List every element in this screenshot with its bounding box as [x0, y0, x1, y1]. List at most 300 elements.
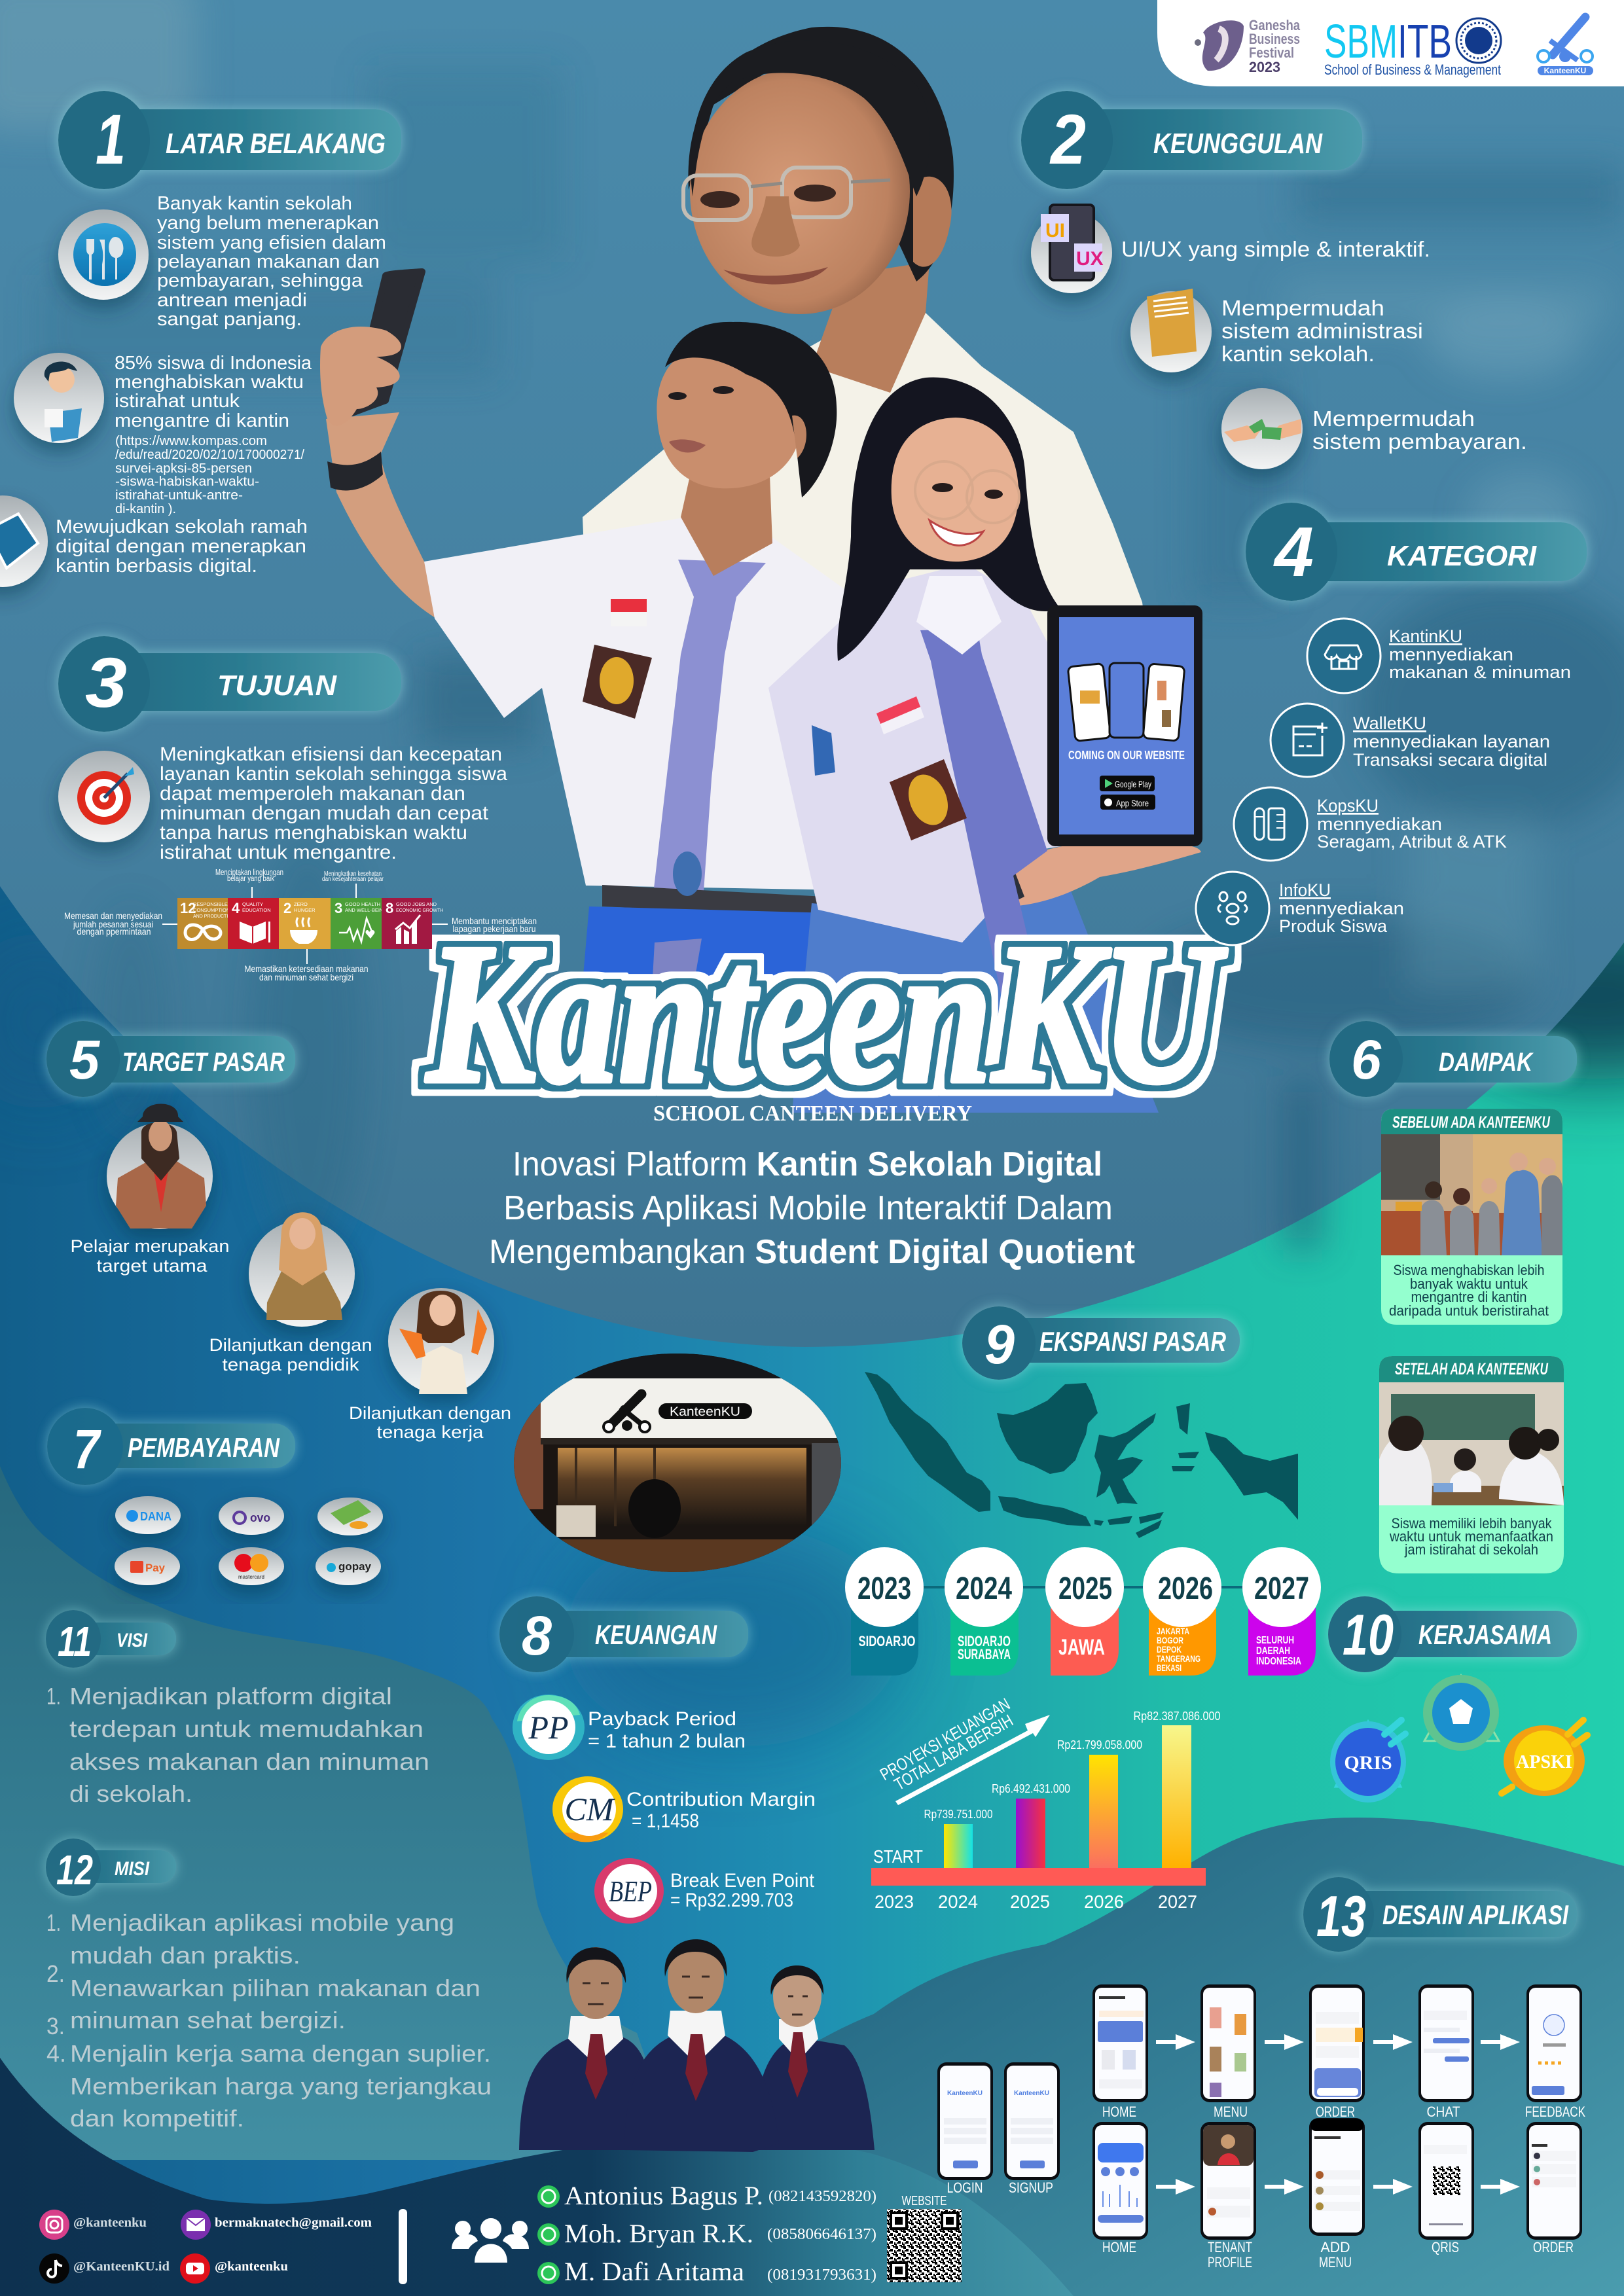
panel: keunggulan items: UI/UX yang simple & interaktif.: [1121, 237, 1430, 261]
KopsKU item: Seragam, Atribut & ATK: [1317, 832, 1507, 852]
panel: tujuan text with target icon: minuman dengan mudah dan cepat: [160, 802, 489, 824]
panel: latar belakang text and icons: Mewujudkan sekolah ramah: [56, 516, 308, 537]
InfoKU item: [1196, 872, 1404, 945]
Mastercard: [219, 1547, 284, 1585]
social media contacts: @kanteenku: [215, 2259, 288, 2274]
panel: financial metrics: Contribution Margin: [626, 1789, 816, 1810]
subtitle: Berbasis Aplikasi Mobile Interaktif Dalam: [503, 1189, 1113, 1227]
app design screens: ADD: [1321, 2239, 1350, 2255]
2027 nationwide: 2027: [1254, 1571, 1309, 1606]
heading 4 Kategori: KATEGORI: [1387, 540, 1537, 572]
card: sebelum ada KanteenKU: mengantre di kantin: [1411, 1289, 1526, 1305]
panel: tujuan text with target icon: dapat memperoleh makanan dan: [160, 783, 465, 804]
projection bar chart: [871, 1694, 1220, 1912]
app design screens: SIGNUP: [1009, 2179, 1053, 2196]
icon: youtube: [180, 2253, 210, 2284]
contact: Antonius: (082143592820): [768, 2188, 876, 2205]
icon: student reading: [14, 353, 104, 443]
QRIS logo: QRIS: [1344, 1752, 1392, 1774]
KantinKU item: [1307, 619, 1571, 693]
arrows row 2: [1156, 2179, 1520, 2195]
KanteenKU small logo: KanteenKU: [1544, 66, 1586, 75]
2027 nationwide: SELURUH: [1256, 1635, 1294, 1646]
map of Indonesia: [865, 1372, 1298, 1538]
app design screens: MENU: [1214, 2104, 1248, 2120]
APSKI logo: [1502, 1720, 1587, 1796]
subtitle: [489, 1145, 1135, 1271]
card: sebelum ada KanteenKU: [1381, 1109, 1562, 1325]
heading 6 Dampak: [1329, 1021, 1577, 1097]
icon: tiktok: [39, 2253, 69, 2284]
contact: Dafi: M. Dafi Aritama: [564, 2257, 744, 2286]
team member left: [519, 1947, 658, 2150]
panel: latar belakang text and icons: sangat panjang.: [157, 309, 302, 330]
heading 9 Ekspansi Pasar: [962, 1306, 1240, 1380]
projection bar chart: START: [873, 1846, 923, 1867]
2026 cities: BEKASI: [1157, 1662, 1182, 1673]
heading 2 Keunggulan: 2: [1049, 99, 1086, 179]
heading 5 Target Pasar: 5: [69, 1029, 100, 1090]
panel: latar belakang text and icons: mengantre di kantin: [115, 410, 289, 431]
misi list: 2.: [46, 1960, 65, 1987]
OVO: ovo: [250, 1511, 270, 1524]
panel: target pasar people: Pelajar merupakan: [71, 1236, 229, 1256]
GoPay: gopay: [338, 1560, 372, 1573]
KopsKU item: [1234, 787, 1507, 861]
SDG 3: GOOD HEALTH: [345, 901, 380, 907]
card: sebelum ada KanteenKU: Siswa menghabiskan lebih: [1393, 1262, 1545, 1278]
photo: KanteenKU canteen booth: [514, 1353, 848, 1573]
2024 Sidoarjo Surabaya: 2024: [956, 1571, 1012, 1606]
InfoKU item: mennyediakan: [1279, 899, 1404, 918]
misi list: Menjalin kerja sama dengan suplier.: [70, 2040, 491, 2067]
SDG 4: QUALITY: [242, 901, 263, 907]
visi list: Menjadikan platform digital: [69, 1683, 392, 1710]
heading 1 Latar Belakang: [58, 91, 401, 189]
SDG 12: AND PRODUCTION: [193, 914, 235, 919]
icon: UI UX phone: UI: [1045, 220, 1065, 242]
heading 1 Latar Belakang: 1: [96, 99, 126, 179]
card: setelah ada KanteenKU: Siswa memiliki lebih banyak: [1392, 1515, 1552, 1532]
misi list: Menjadikan aplikasi mobile yang: [70, 1909, 454, 1936]
Mastercard: mastercard: [238, 1574, 264, 1580]
screen: signup: [1004, 2062, 1060, 2180]
panel: payment methods: [115, 1496, 383, 1585]
team member centre: [624, 1939, 779, 2152]
SDG callout top: dan kesejahteraan pelajar: [322, 876, 384, 883]
SBM ITB logo: SBM: [1324, 16, 1398, 68]
QRIS logo: [1330, 1720, 1406, 1803]
panel: financial metrics: Break Even Point: [670, 1870, 815, 1892]
Tut Wuri Handayani logo: [1423, 1675, 1499, 1751]
misi list: 4.: [46, 2040, 66, 2067]
2026 cities: DEPOK: [1157, 1644, 1182, 1655]
card: sebelum ada KanteenKU: banyak waktu untuk: [1410, 1276, 1528, 1292]
market expansion timeline: [845, 1547, 1321, 1676]
projection bar chart: 2025: [1010, 1892, 1050, 1912]
website QR code: [887, 2194, 962, 2282]
visi list: 1.: [46, 1683, 61, 1710]
projection bar chart: 2023: [875, 1892, 914, 1912]
visi list: akses makanan dan minuman: [69, 1748, 429, 1775]
heading 12 Misi: [46, 1839, 176, 1896]
SDG 8: [382, 898, 443, 949]
visi list: terdepan untuk memudahkan: [69, 1715, 424, 1742]
app design screens: [937, 1984, 1585, 2270]
heading 12 Misi: MISI: [115, 1858, 150, 1880]
ShopeePay: Pay: [145, 1562, 166, 1574]
SDG 3: 3: [334, 900, 342, 916]
tablet mini phones: [1068, 663, 1185, 742]
heading 7 Pembayaran: [47, 1408, 295, 1485]
2025 Jawa: JAWA: [1058, 1635, 1105, 1660]
SDG 12: 12: [180, 900, 196, 916]
App Store badge: [1100, 795, 1155, 810]
KantinKU item: makanan & minuman: [1389, 662, 1571, 682]
panel: financial metrics: [513, 1695, 816, 1924]
projection bar chart: 2024: [938, 1892, 978, 1912]
panel: latar belakang text and icons: -siswa-habiskan-waktu-: [115, 475, 259, 489]
heading 10 Kerjasama: [1328, 1596, 1577, 1672]
heading 10 Kerjasama: KERJASAMA: [1418, 1619, 1552, 1650]
icon: people group: [452, 2218, 529, 2263]
badge: CM: [552, 1776, 623, 1842]
boy arm and phone: [320, 272, 455, 619]
heading 13 Desain Aplikasi: [1303, 1877, 1577, 1952]
badge: CM: CM: [564, 1791, 615, 1827]
screen: add menu: [1309, 2118, 1365, 2236]
SDG callout bottom: Memastikan ketersediaan makanan: [245, 963, 368, 974]
heading 3 Tujuan: [58, 636, 401, 732]
KantinKU item: mennyediakan: [1389, 645, 1513, 664]
team contact list: [537, 2181, 876, 2286]
arrows row 1: [1156, 2034, 1520, 2050]
panel: keunggulan items: Mempermudah: [1221, 296, 1384, 320]
tablet showing the app: [1047, 605, 1202, 846]
partner logos: [1330, 1675, 1587, 1803]
arrow with projection caption: PROYEKSI KEUANGAN: [876, 1694, 1013, 1784]
social media contacts: @kanteenku: [73, 2215, 147, 2230]
OVO: [219, 1497, 284, 1535]
heading 2 Keunggulan: [1021, 91, 1362, 189]
team member right: [753, 1965, 875, 2150]
SDG callout sides: lapagan pekerjaan baru: [453, 924, 535, 934]
screen: home wallet: [1092, 2122, 1148, 2240]
misi list: Memberikan harga yang terjangkau: [70, 2073, 492, 2100]
worker: [388, 1288, 494, 1394]
SDG 4: 4: [232, 900, 240, 916]
Ganesha Business Festival logo: [1195, 17, 1301, 75]
panel: keunggulan items: kantin sekolah.: [1221, 342, 1375, 366]
projection bar chart: Rp21.799.058.000: [1057, 1738, 1142, 1751]
panel: latar belakang text and icons: pelayanan makanan dan: [157, 251, 380, 272]
GoPay: [316, 1547, 381, 1585]
card: setelah ada KanteenKU: waktu untuk memanfaatkan: [1389, 1528, 1553, 1545]
panel: target pasar people: tenaga kerja: [377, 1422, 484, 1442]
screen: QRIS code: [1418, 2122, 1474, 2240]
cash: [317, 1498, 383, 1535]
icon: instagram: [39, 2210, 69, 2240]
SDG callout top: Meningkatkan kesehatan: [324, 870, 382, 878]
2026 cities: [1143, 1547, 1221, 1676]
SBM ITB logo: ITB: [1398, 16, 1452, 68]
screen: home: [1092, 1984, 1148, 2102]
2026 cities: JAKARTA: [1157, 1626, 1189, 1636]
panel: target pasar people: tenaga pendidik: [223, 1355, 359, 1374]
SDG callout bottom: dan minuman sehat bergizi: [259, 972, 353, 982]
InfoKU item: InfoKU: [1279, 880, 1331, 900]
panel: latar belakang text and icons: di-kantin ).: [115, 502, 176, 516]
WalletKU item: [1271, 704, 1550, 777]
heading 9 Ekspansi Pasar: 9: [984, 1314, 1015, 1375]
2024 Sidoarjo Surabaya: SURABAYA: [958, 1646, 1011, 1662]
misi list: 3.: [46, 2013, 65, 2039]
heading 6 Dampak: DAMPAK: [1439, 1048, 1534, 1077]
sponsor logos panel: [1157, 0, 1624, 86]
panel: tujuan text with target icon: tanpa harus menghabiskan waktu: [160, 822, 467, 844]
Ganesha Business Festival logo: Festival: [1249, 45, 1294, 61]
screen: chat: [1418, 1984, 1474, 2102]
WalletKU item: WalletKU: [1353, 713, 1426, 733]
icon: UI UX phone: [1031, 205, 1112, 293]
card: setelah ada KanteenKU: [1379, 1356, 1564, 1573]
badge: PP: PP: [528, 1709, 569, 1746]
panel: latar belakang text and icons: sistem yang efisien dalam: [157, 232, 386, 253]
blurred photo texture in the top background: [0, 0, 1624, 1257]
Ganesha Business Festival logo: Business: [1249, 31, 1300, 47]
misi list: minuman sehat bergizi.: [70, 2007, 346, 2034]
heading 13 Desain Aplikasi: 13: [1316, 1884, 1366, 1948]
screen: menu: [1200, 1984, 1256, 2102]
icon: UI UX phone: UX: [1076, 248, 1104, 270]
contact: Bryan: [537, 2219, 876, 2248]
SDG callout bottom: [245, 963, 368, 982]
icon: cutlery: [58, 209, 149, 300]
heading 8 Keuangan: [499, 1596, 748, 1672]
icon: email: [181, 2210, 211, 2240]
SBM ITB logo: [1324, 16, 1501, 78]
KantinKU item: KantinKU: [1389, 626, 1462, 646]
projection bar chart: Rp6.492.431.000: [992, 1782, 1070, 1795]
left blob (visi misi): [0, 1466, 681, 2160]
photo: KanteenKU canteen booth: KanteenKU: [670, 1405, 740, 1419]
panel: latar belakang text and icons: 85% siswa di Indonesia: [115, 353, 312, 374]
SDG 2: ZERO: [294, 901, 308, 907]
contact: Dafi: (081931793631): [767, 2267, 876, 2284]
social media contacts: bermaknatech@gmail.com: [215, 2215, 372, 2230]
contact: Dafi: [537, 2257, 876, 2286]
screen: login: KanteenKU: [947, 2090, 983, 2097]
SDG 8: ECONOMIC GROWTH: [396, 908, 443, 913]
panel: keunggulan items: sistem administrasi: [1221, 319, 1423, 343]
heading 10 Kerjasama: 10: [1343, 1602, 1394, 1667]
SDG callout top: Menciptakan lingkungan: [215, 868, 283, 877]
panel: kategori list: [1196, 619, 1571, 945]
projection bar chart: Rp739.751.000: [924, 1808, 992, 1821]
panel: tujuan text with target icon: layanan kantin sekolah sehingga siswa: [160, 763, 507, 785]
tagline: SCHOOL CANTEEN DELIVERY: [653, 1102, 972, 1126]
heading 3 Tujuan: TUJUAN: [217, 670, 337, 702]
panel: financial metrics: Payback Period: [588, 1708, 736, 1730]
2025 Jawa: [1045, 1547, 1124, 1676]
bottom right blob (section 13): [641, 1818, 1624, 2296]
contact: Antonius: Antonius Bagus P.: [564, 2181, 763, 2210]
App Store badge: App Store: [1116, 798, 1149, 808]
heading 4 Kategori: 4: [1273, 512, 1314, 591]
2027 nationwide: INDONESIA: [1256, 1656, 1301, 1667]
SDG 2: 2: [283, 900, 291, 916]
heading 5 Target Pasar: TARGET PASAR: [122, 1048, 285, 1077]
panel: tujuan text with target icon: istirahat untuk mengantre.: [160, 842, 397, 863]
icon: money exchange: [1221, 388, 1303, 469]
heading 12 Misi: 12: [56, 1846, 93, 1893]
heading 4 Kategori: [1246, 503, 1587, 601]
panel: latar belakang text and icons: menghabiskan waktu: [115, 372, 304, 393]
man front hair: [691, 41, 930, 196]
2023 Sidoarjo: 2023: [857, 1571, 911, 1606]
2024 Sidoarjo Surabaya: [945, 1547, 1023, 1676]
badge: PP: [513, 1695, 585, 1760]
screen: order list: [1526, 2122, 1582, 2240]
heading 2 Keunggulan: KEUNGGULAN: [1153, 128, 1323, 160]
boy student: [320, 272, 844, 1060]
SDG 12: [177, 898, 235, 949]
panel: latar belakang text and icons: (https://www.kompas.com: [115, 434, 267, 448]
dark shading behind circle edge: [0, 910, 1624, 1748]
SDG callout sides: [64, 910, 537, 937]
badge: BEP: BEP: [609, 1874, 652, 1908]
SDG 12: CONSUMPTION: [193, 907, 230, 913]
misi list: 1.: [46, 1909, 61, 1936]
2027 nationwide: [1242, 1547, 1321, 1676]
subtitle: Inovasi Platform Kantin Sekolah Digital: [513, 1145, 1102, 1183]
social media contacts: [39, 2210, 372, 2284]
KanteenKU main logo: KanteenKU: [424, 902, 1227, 1125]
SDG 3: [331, 898, 387, 949]
ShopeePay: [115, 1547, 180, 1585]
InfoKU item: Produk Siswa: [1279, 916, 1388, 936]
visi list: di sekolah.: [69, 1780, 192, 1807]
social media contacts: @KanteenKU.id: [73, 2259, 170, 2274]
KopsKU item: KopsKU: [1317, 796, 1379, 816]
app design screens: FEEDBACK: [1525, 2104, 1585, 2120]
icon: target: [58, 751, 150, 842]
2023 Sidoarjo: SIDOARJO: [859, 1633, 915, 1649]
panel: financial metrics: = Rp32.299.703: [670, 1890, 793, 1911]
contact: Bryan: (085806646137): [767, 2226, 876, 2243]
screen: order: [1309, 1984, 1365, 2102]
panel: latar belakang text and icons: digital dengan menerapkan: [56, 536, 306, 557]
visi list: [46, 1683, 429, 1807]
panel: latar belakang text and icons: /edu/read/2020/02/10/170000271/: [115, 448, 304, 462]
SDG 4: EDUCATION: [242, 907, 271, 913]
heading 9 Ekspansi Pasar: EKSPANSI PASAR: [1039, 1326, 1227, 1357]
projection bar chart: 2027: [1158, 1892, 1197, 1912]
Ganesha Business Festival logo: Ganesha: [1249, 17, 1301, 33]
contact: Bryan: Moh. Bryan R.K.: [564, 2219, 753, 2248]
screen: tenant profile: [1200, 2122, 1256, 2240]
website QR code: WEBSITE: [902, 2194, 947, 2208]
photo: queue at school canteen: [1381, 1134, 1562, 1255]
2025 Jawa: 2025: [1058, 1571, 1112, 1606]
app design screens: PROFILE: [1208, 2254, 1252, 2270]
teacher: [249, 1212, 355, 1327]
subtitle: Mengembangkan Student Digital Quotient: [489, 1233, 1135, 1271]
SDG 2: [279, 898, 331, 949]
APSKI logo: APSKI: [1516, 1752, 1572, 1772]
SDG goals block: [64, 868, 537, 982]
KanteenKU small logo: [1538, 17, 1593, 75]
SDG callout sides: Memesan dan menyediakan: [64, 910, 162, 921]
panel: latar belakang text and icons: istirahat-untuk-antre-: [115, 488, 243, 503]
app design screens: LOGIN: [947, 2179, 983, 2196]
bottom contact band: [0, 2058, 1074, 2296]
heading 7 Pembayaran: PEMBAYARAN: [128, 1432, 280, 1463]
panel: tujuan text with target icon: [58, 744, 507, 863]
Ganesha Business Festival logo: 2023: [1249, 59, 1280, 75]
card: sebelum ada KanteenKU: SEBELUM ADA KANTEENKU: [1392, 1113, 1551, 1132]
2027 nationwide: DAERAH: [1256, 1645, 1290, 1657]
SDG callout sides: jumlah pesanan sesuai: [73, 919, 153, 929]
SDG callout top: belajar yang baik: [227, 875, 274, 883]
photo: students in class: [1379, 1382, 1564, 1505]
heading 6 Dampak: 6: [1351, 1029, 1382, 1090]
heading 3 Tujuan: 3: [85, 643, 127, 722]
SDG 8: GOOD JOBS AND: [396, 901, 437, 907]
app design screens: CHAT: [1427, 2104, 1460, 2120]
student in scout uniform: [107, 1103, 213, 1229]
app design screens: MENU: [1319, 2254, 1352, 2270]
heading 1 Latar Belakang: LATAR BELAKANG: [166, 128, 386, 160]
large blue-grey top circle background: [0, 0, 1624, 1347]
SDG 2: HUNGER: [294, 907, 316, 913]
screen: feedback: [1526, 1984, 1582, 2102]
tablet showing the app: COMING ON OUR WEBSITE: [1068, 749, 1185, 762]
panel: target pasar people: Dilanjutkan dengan: [209, 1335, 372, 1355]
SDG 8: 8: [386, 900, 393, 916]
SDG callout sides: Membantu menciptakan: [452, 916, 537, 926]
panel: latar belakang text and icons: pembayaran, sehingga: [157, 270, 363, 291]
WalletKU item: mennyediakan layanan: [1353, 732, 1550, 751]
DANA: [115, 1496, 181, 1534]
projection bar chart: Rp82.387.086.000: [1134, 1710, 1220, 1723]
SDG 4: [228, 898, 279, 949]
girl student: [768, 378, 1201, 1113]
panel: latar belakang text and icons: kantin berbasis digital.: [56, 556, 257, 577]
heading 8 Keuangan: 8: [522, 1605, 552, 1666]
panel: tujuan text with target icon: Meningkatkan efisiensi dan kecepatan: [160, 744, 502, 765]
misi list: Menawarkan pilihan makanan dan: [70, 1975, 480, 2001]
panel: keunggulan items: [1031, 205, 1527, 469]
heading 13 Desain Aplikasi: DESAIN APLIKASI: [1382, 1899, 1569, 1930]
panel: latar belakang text and icons: istirahat untuk: [115, 391, 240, 412]
2026 cities: 2026: [1158, 1571, 1213, 1606]
app design screens: ORDER: [1533, 2239, 1574, 2255]
panel: latar belakang text and icons: Banyak kantin sekolah: [157, 193, 352, 214]
app design screens: HOME: [1102, 2239, 1136, 2255]
panel: target pasar people: target utama: [97, 1256, 208, 1276]
screen: login: [937, 2062, 993, 2180]
misi list: dan kompetitif.: [70, 2105, 244, 2132]
app design screens: TENANT: [1208, 2239, 1252, 2255]
misi list: mudah dan praktis.: [70, 1942, 300, 1969]
heading 11 Visi: 11: [58, 1618, 92, 1665]
SDG callout top: [215, 868, 384, 883]
card: setelah ada KanteenKU: jam istirahat di sekolah: [1404, 1541, 1538, 1558]
app design screens: QRIS: [1432, 2239, 1459, 2255]
2026 cities: TANGERANG: [1157, 1653, 1200, 1664]
Google Play badge: Google Play: [1115, 779, 1151, 789]
